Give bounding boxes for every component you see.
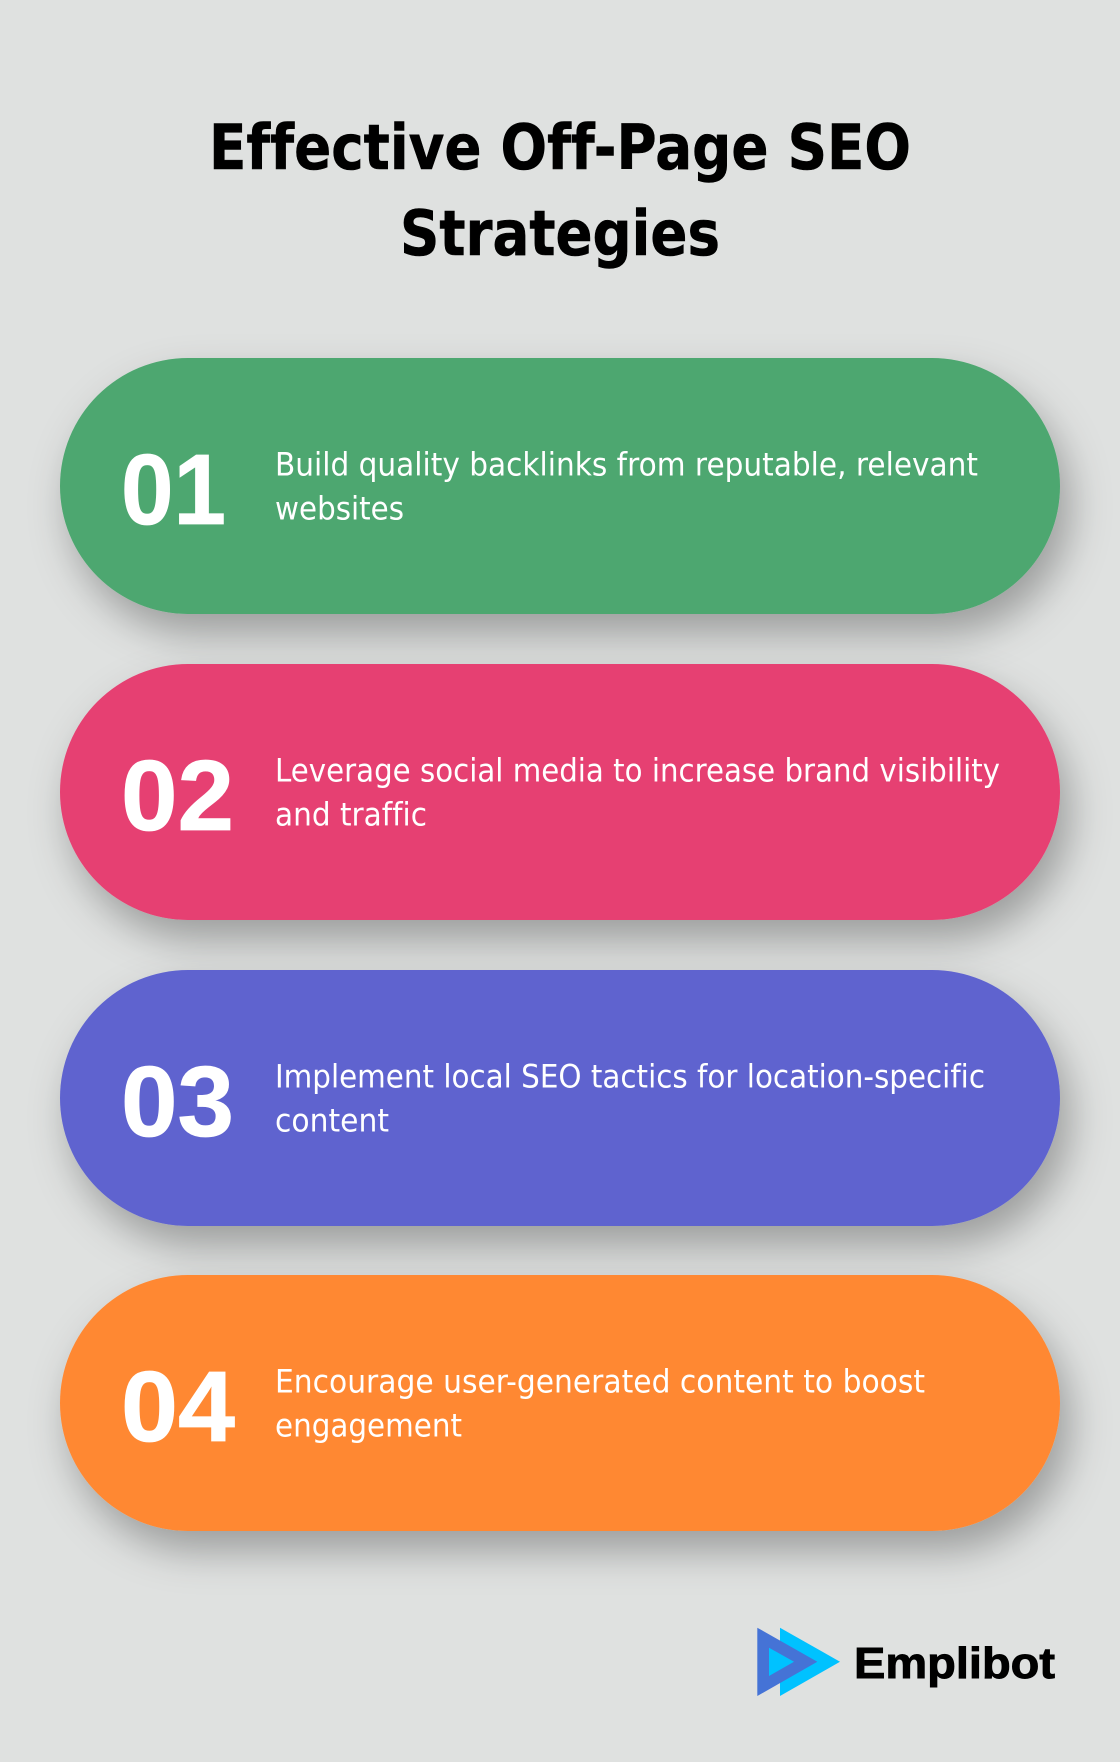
text 03 — [275, 1058, 985, 1140]
panel: strategy 01 — [60, 358, 1060, 614]
number 02: 02 — [121, 740, 234, 852]
panel: strategy 04 — [60, 1275, 1060, 1531]
title: Strategies — [400, 197, 720, 270]
pill background 04 — [60, 1275, 1060, 1531]
text 01: websites — [275, 490, 404, 528]
text 01 — [275, 446, 978, 528]
pill background 03 — [60, 970, 1060, 1226]
icon: play triangles — [757, 1628, 840, 1696]
text 03: content — [275, 1102, 389, 1140]
wordmark: Emplibot — [854, 1639, 1055, 1688]
text 04: engagement — [275, 1406, 462, 1444]
panel: strategy 02 — [60, 664, 1060, 920]
number 04: 04 — [121, 1351, 235, 1463]
text 04 — [275, 1362, 925, 1444]
pill background 02 — [60, 664, 1060, 920]
logo: Emplibot — [757, 1628, 1055, 1696]
panel: strategy 03 — [60, 970, 1060, 1226]
text 02 — [275, 752, 1000, 834]
text 03: Implement local SEO tactics for location-specific — [275, 1058, 985, 1096]
text 04: Encourage user-generated content to boost — [275, 1362, 925, 1400]
text 01: Build quality backlinks from reputable, relevant — [275, 446, 978, 484]
title: Effective Off-Page SEO — [209, 111, 911, 184]
title — [209, 111, 911, 270]
pill background 01 — [60, 358, 1060, 614]
text 02: and traffic — [275, 796, 427, 834]
text 02: Leverage social media to increase brand visibility — [275, 752, 1000, 790]
number 03: 03 — [121, 1046, 234, 1158]
number 01: 01 — [121, 434, 226, 546]
